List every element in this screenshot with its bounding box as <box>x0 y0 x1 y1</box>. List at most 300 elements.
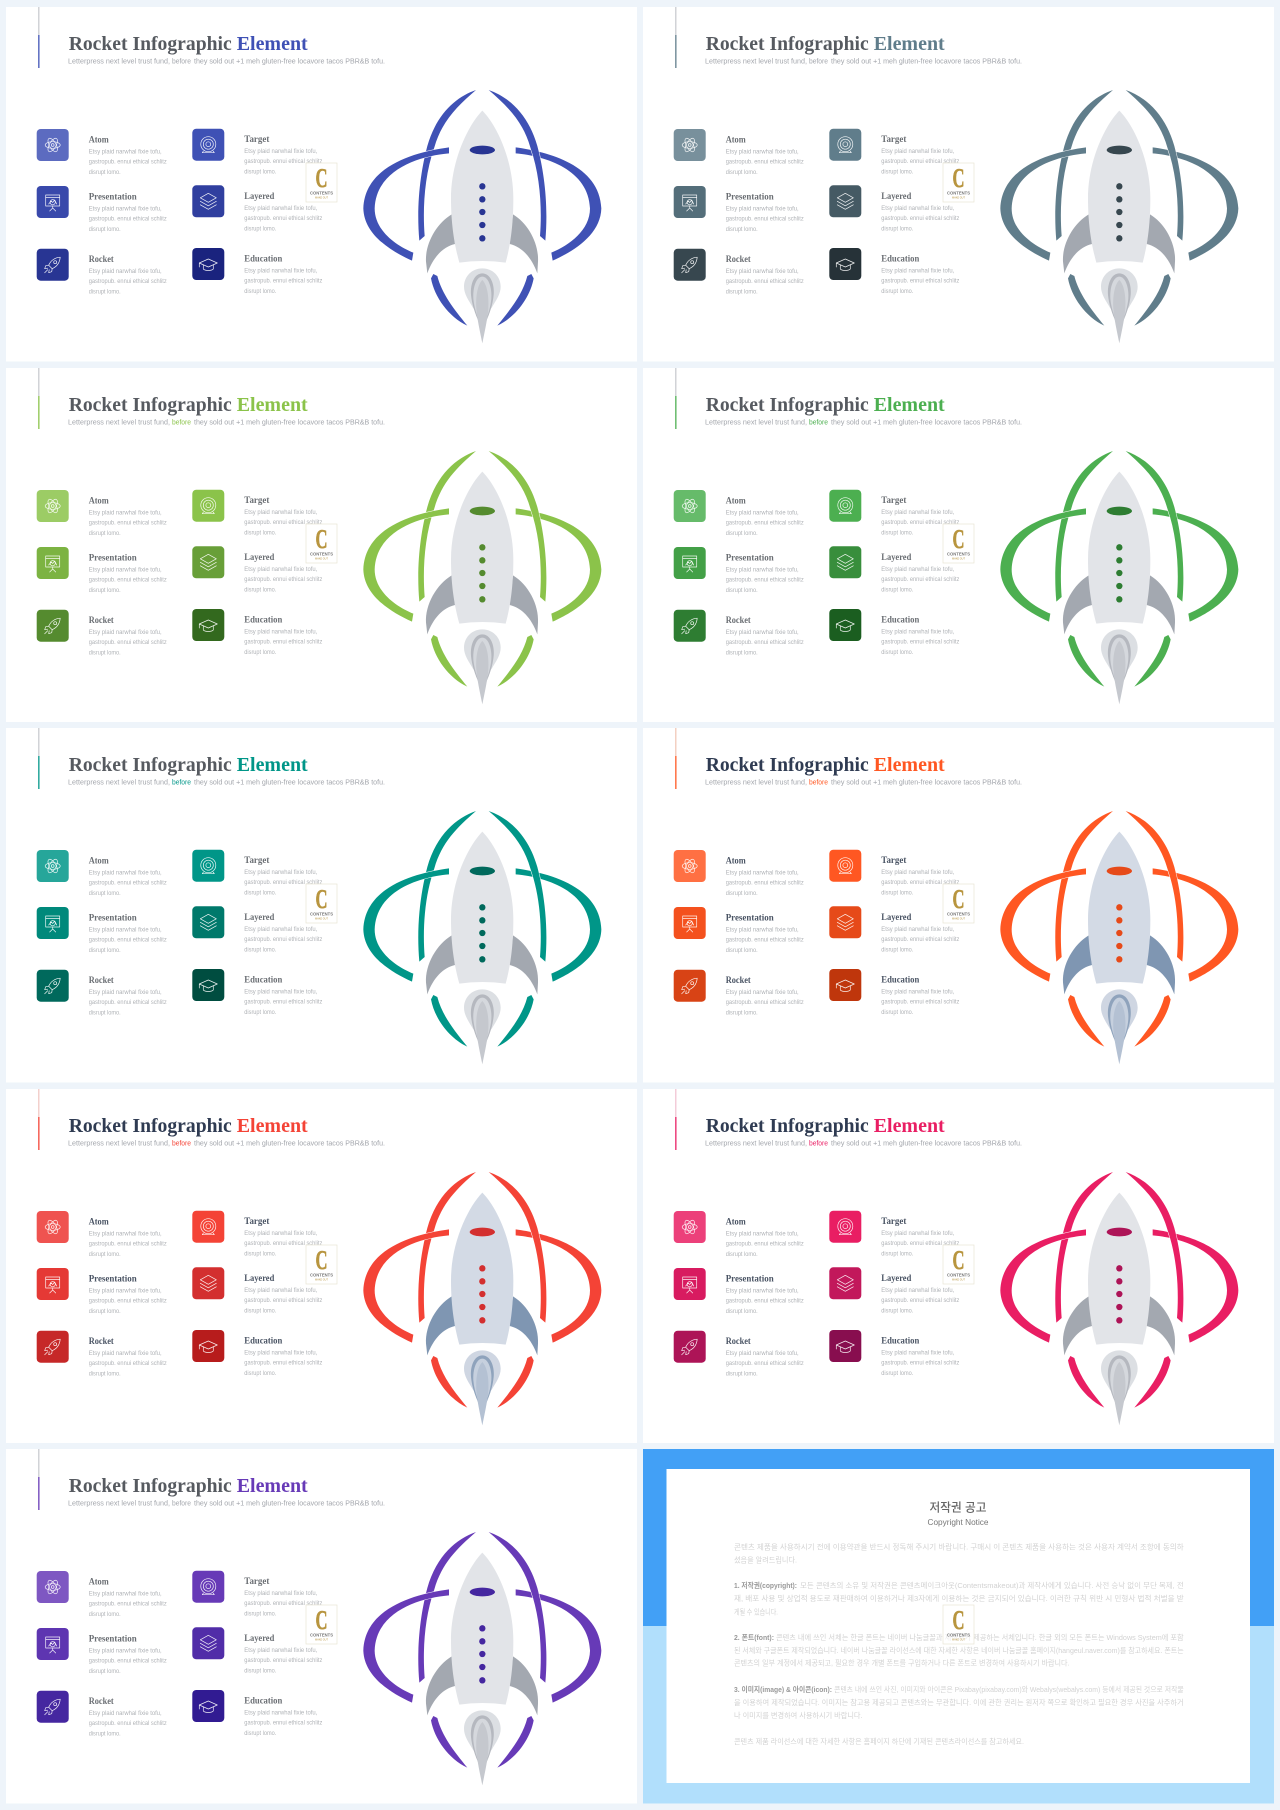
watermark badge: MAKE OUT <box>952 1278 965 1281</box>
subtitle: before <box>172 56 191 66</box>
rocket illustration <box>1000 811 1238 1064</box>
item: Layered: gastropub. ennui ethical schlitz <box>881 936 959 943</box>
watermark badge: MAKE OUT <box>952 1638 965 1642</box>
accent rule <box>38 1449 40 1510</box>
notice section 2: 2. 폰트(font): <box>734 1633 774 1642</box>
item: Atom: disrupt lomo. <box>726 890 758 897</box>
item: Rocket: disrupt lomo. <box>726 289 758 296</box>
panel: copyright notice <box>643 1449 1274 1804</box>
item: Rocket: Etsy plaid narwhal fixie tofu, <box>726 989 799 996</box>
item: Target: disrupt lomo. <box>881 529 913 536</box>
item: Target: disrupt lomo. <box>881 169 913 176</box>
watermark badge: MAKE OUT <box>315 918 328 920</box>
item: Education: Education <box>881 615 920 625</box>
item: Atom: disrupt lomo. <box>89 1611 121 1618</box>
item: Atom <box>37 129 167 176</box>
watermark badge: C <box>952 524 964 554</box>
subtitle: before <box>809 417 828 426</box>
item: Atom: Atom <box>726 1217 746 1227</box>
title <box>706 394 945 416</box>
item: Education: Etsy plaid narwhal fixie tofu, <box>881 268 954 274</box>
watermark badge: CONTENTS <box>947 1632 970 1638</box>
item: Atom: gastropub. ennui ethical schlitz <box>726 158 804 166</box>
watermark badge: CONTENTS <box>947 1272 970 1277</box>
title: Rocket Infographic <box>69 394 232 416</box>
subtitle: they sold out +1 meh gluten-free locavore tacos PBR&B tofu. <box>194 56 385 66</box>
item: Rocket: Etsy plaid narwhal fixie tofu, <box>89 1710 162 1717</box>
item: Target: Etsy plaid narwhal fixie tofu, <box>244 509 317 516</box>
item: Atom: Atom <box>726 496 746 506</box>
item: Rocket: Rocket <box>726 976 751 986</box>
item: Rocket <box>37 609 167 656</box>
item: Target: Etsy plaid narwhal fixie tofu, <box>881 509 954 516</box>
watermark badge <box>943 1605 974 1644</box>
notice section 3: 나 이미지를 변경하여 사용하시기 바랍니다. <box>734 1711 862 1720</box>
item: Atom: gastropub. ennui ethical schlitz <box>89 158 167 166</box>
item: Atom: gastropub. ennui ethical schlitz <box>89 880 167 886</box>
subtitle: before <box>172 1498 191 1508</box>
item: Atom: Etsy plaid narwhal fixie tofu, <box>89 1230 162 1237</box>
subtitle: Letterpress next level trust fund, <box>68 417 170 426</box>
item: Layered: gastropub. ennui ethical schlitz <box>244 936 322 943</box>
item: Rocket: gastropub. ennui ethical schlitz <box>726 278 804 285</box>
watermark badge: MAKE OUT <box>315 557 328 560</box>
title <box>69 1114 308 1136</box>
item: Presentation <box>37 186 167 233</box>
item: Education <box>192 248 322 295</box>
item: Layered: disrupt lomo. <box>881 946 913 953</box>
panel: light green rocket infographic <box>6 368 637 722</box>
watermark badge: C <box>316 884 328 914</box>
title: Element <box>874 754 945 776</box>
panel: indigo rocket infographic <box>6 7 637 362</box>
watermark badge: MAKE OUT <box>952 196 965 200</box>
item: Target: Etsy plaid narwhal fixie tofu, <box>244 1230 317 1237</box>
item: Education: Education <box>881 254 920 264</box>
item: Education: Etsy plaid narwhal fixie tofu, <box>244 1349 317 1356</box>
panel: red rocket infographic <box>6 1089 637 1443</box>
subtitle: Letterpress next level trust fund, <box>705 56 807 66</box>
item: Atom: disrupt lomo. <box>726 169 758 176</box>
item: Presentation <box>674 186 804 233</box>
title <box>706 1114 945 1136</box>
item: Atom: Etsy plaid narwhal fixie tofu, <box>89 148 162 156</box>
item: Presentation: disrupt lomo. <box>89 1668 121 1675</box>
item: Rocket: Rocket <box>726 255 751 265</box>
item: Education <box>829 248 959 295</box>
item: Target: gastropub. ennui ethical schlitz <box>881 879 959 886</box>
notice section 2: 콘텐츠의 일부 계정에서 제공되고, 필요한 경우 개별 폰트를 구입하거나 다른 폰트로 변경하여 사용하시기 바랍니다. <box>734 1658 1070 1668</box>
item: Layered: Layered <box>244 1634 275 1644</box>
item: Atom: Atom <box>726 856 746 866</box>
subtitle <box>68 1498 385 1508</box>
panel: deep orange rocket infographic <box>643 728 1274 1082</box>
watermark badge: CONTENTS <box>310 551 333 556</box>
item: Atom: Atom <box>89 1578 109 1588</box>
notice section 1: 1. 저작권(copyright): <box>734 1581 797 1590</box>
item: Target: gastropub. ennui ethical schlitz <box>881 1240 959 1247</box>
item: Layered <box>192 1627 322 1674</box>
notice section 1 <box>734 1581 1184 1616</box>
title: Rocket Infographic <box>69 33 232 55</box>
rocket illustration <box>363 90 601 343</box>
item: Presentation: gastropub. ennui ethical schlitz <box>89 936 167 944</box>
item: Rocket <box>674 249 804 296</box>
item: Layered: Layered <box>244 192 275 202</box>
item: Target <box>829 129 959 176</box>
item: Atom: Etsy plaid narwhal fixie tofu, <box>89 509 162 516</box>
item: Atom: disrupt lomo. <box>89 890 121 897</box>
item: Education: gastropub. ennui ethical schlitz <box>881 638 959 645</box>
subtitle: they sold out +1 meh gluten-free locavore tacos PBR&B tofu. <box>831 1138 1022 1147</box>
item: Presentation: Etsy plaid narwhal fixie tofu, <box>89 206 162 212</box>
item: Presentation <box>674 1268 804 1314</box>
subtitle: before <box>809 1138 828 1147</box>
rocket illustration <box>1000 90 1238 343</box>
item: Layered: Etsy plaid narwhal fixie tofu, <box>881 205 954 212</box>
item: Target: Etsy plaid narwhal fixie tofu, <box>881 148 954 155</box>
item: Education: gastropub. ennui ethical schlitz <box>244 998 322 1006</box>
item: Presentation: Presentation <box>726 192 774 202</box>
item: Layered: disrupt lomo. <box>881 586 913 593</box>
panel: pink rocket infographic <box>643 1089 1274 1443</box>
item: Education: disrupt lomo. <box>881 288 913 295</box>
item: Atom: gastropub. ennui ethical schlitz <box>726 880 804 886</box>
notice footer line: 콘텐츠 제품 라이선스에 대한 자세한 사항은 홈페이지 하단에 기재된 콘텐츠라이선스를 참고하세요. <box>734 1737 1024 1746</box>
item: Education: gastropub. ennui ethical schlitz <box>881 998 959 1006</box>
watermark badge <box>306 163 337 202</box>
item: Presentation <box>674 907 804 954</box>
subtitle: they sold out +1 meh gluten-free locavore tacos PBR&B tofu. <box>831 778 1022 786</box>
item: Education: disrupt lomo. <box>244 1370 276 1376</box>
notice intro: 셨음을 알려드립니다. <box>734 1556 797 1564</box>
notice section 1: 게될 수 있습니다. <box>734 1608 778 1616</box>
item: Presentation: Etsy plaid narwhal fixie tofu, <box>89 926 162 934</box>
notice section 1: 모든 콘텐츠의 소유 및 저작권은 콘텐츠메이크아웃(Contentsmakeout)과 제작사에게 있습니다. 사전 승낙 없이 무단 복제, 전 <box>800 1581 1184 1590</box>
item: Rocket: gastropub. ennui ethical schlitz <box>89 639 167 646</box>
item: Education: Etsy plaid narwhal fixie tofu, <box>244 988 317 996</box>
item: Rocket: gastropub. ennui ethical schlitz <box>726 1360 804 1367</box>
item: Rocket: Etsy plaid narwhal fixie tofu, <box>89 268 162 275</box>
item: Education: disrupt lomo. <box>881 648 913 656</box>
subtitle <box>705 1138 1022 1147</box>
item: Presentation: gastropub. ennui ethical schlitz <box>726 576 804 583</box>
item: Presentation: gastropub. ennui ethical schlitz <box>89 216 167 222</box>
item: Rocket: disrupt lomo. <box>89 1370 121 1377</box>
item: Rocket <box>674 970 804 1017</box>
item: Rocket <box>37 1691 167 1738</box>
item: Atom: disrupt lomo. <box>89 1250 121 1258</box>
item: Target: gastropub. ennui ethical schlitz <box>244 1600 322 1607</box>
item: Education: gastropub. ennui ethical schlitz <box>244 638 322 645</box>
item: Target: Etsy plaid narwhal fixie tofu, <box>244 869 317 876</box>
item: Atom: disrupt lomo. <box>726 1250 758 1258</box>
notice section 3 <box>734 1685 1184 1720</box>
item: Rocket: gastropub. ennui ethical schlitz <box>89 278 167 285</box>
item: Atom: disrupt lomo. <box>89 530 121 536</box>
item: Education: Education <box>244 254 283 264</box>
subtitle: they sold out +1 meh gluten-free locavore tacos PBR&B tofu. <box>194 417 385 426</box>
item: Layered <box>192 546 322 593</box>
watermark badge <box>943 1244 974 1284</box>
watermark badge: CONTENTS <box>310 1632 333 1638</box>
item: Layered: Etsy plaid narwhal fixie tofu, <box>244 926 317 933</box>
item: Target: Etsy plaid narwhal fixie tofu, <box>244 1590 317 1597</box>
title <box>69 1475 308 1497</box>
rocket illustration <box>363 1172 601 1425</box>
title: Rocket Infographic <box>706 394 869 416</box>
item: Education <box>829 969 959 1016</box>
item: Target: gastropub. ennui ethical schlitz <box>881 158 959 165</box>
title: Rocket Infographic <box>706 754 869 776</box>
subtitle: Letterpress next level trust fund, <box>705 1138 807 1147</box>
item: Presentation: gastropub. ennui ethical schlitz <box>89 1658 167 1664</box>
item: Presentation: gastropub. ennui ethical schlitz <box>89 1297 167 1304</box>
item: Rocket: disrupt lomo. <box>89 289 121 296</box>
item: Rocket: Rocket <box>89 976 114 986</box>
item: Presentation: Etsy plaid narwhal fixie tofu, <box>726 206 799 212</box>
item: Presentation: gastropub. ennui ethical schlitz <box>726 216 804 222</box>
item: Presentation: disrupt lomo. <box>89 1308 121 1314</box>
subtitle: they sold out +1 meh gluten-free locavore tacos PBR&B tofu. <box>831 417 1022 426</box>
notice heading: 저작권 공고 <box>930 1500 986 1514</box>
item: Target: disrupt lomo. <box>881 890 913 897</box>
item: Presentation <box>674 546 804 594</box>
title: Rocket Infographic <box>706 33 869 55</box>
item: Education: Etsy plaid narwhal fixie tofu, <box>244 1710 317 1716</box>
item: Rocket: Etsy plaid narwhal fixie tofu, <box>726 1350 799 1357</box>
item: Target <box>192 850 322 897</box>
title: Element <box>237 33 308 55</box>
notice section 3: 3. 이미지(image) & 아이콘(icon): <box>734 1685 832 1694</box>
item: Presentation: Presentation <box>89 1634 137 1644</box>
item: Target: Target <box>881 135 907 145</box>
item: Atom: Etsy plaid narwhal fixie tofu, <box>89 1590 162 1598</box>
subtitle <box>68 56 385 66</box>
subtitle <box>705 56 1022 66</box>
item: Target: gastropub. ennui ethical schlitz <box>244 879 322 886</box>
watermark badge: C <box>952 884 964 914</box>
subtitle: they sold out +1 meh gluten-free locavore tacos PBR&B tofu. <box>194 1138 385 1147</box>
watermark badge <box>943 163 974 202</box>
item: Layered: Etsy plaid narwhal fixie tofu, <box>881 1286 954 1293</box>
item: Presentation: Presentation <box>89 192 137 202</box>
item: Target <box>192 1210 322 1257</box>
accent rule <box>675 7 677 68</box>
item: Layered: Layered <box>881 1273 912 1283</box>
item: Rocket: Rocket <box>89 1337 114 1347</box>
item: Education: Education <box>244 1696 283 1706</box>
item: Presentation: disrupt lomo. <box>726 586 758 594</box>
item: Education: disrupt lomo. <box>244 648 276 656</box>
item: Layered: disrupt lomo. <box>244 1667 276 1674</box>
item: Rocket: gastropub. ennui ethical schlitz <box>89 999 167 1006</box>
item: Target: disrupt lomo. <box>244 169 276 176</box>
item: Atom <box>37 850 167 897</box>
item: Layered: Layered <box>881 913 912 923</box>
accent rule <box>38 728 40 789</box>
title: Element <box>237 394 308 416</box>
watermark badge: CONTENTS <box>947 190 970 196</box>
item: Layered: gastropub. ennui ethical schlitz <box>244 575 322 582</box>
subtitle: before <box>172 1138 191 1147</box>
item: Target: gastropub. ennui ethical schlitz <box>244 519 322 526</box>
title: Element <box>237 1475 308 1497</box>
item: Atom: Etsy plaid narwhal fixie tofu, <box>726 148 799 156</box>
item: Atom: gastropub. ennui ethical schlitz <box>726 519 804 526</box>
item: Rocket <box>674 609 804 656</box>
item: Layered: gastropub. ennui ethical schlitz <box>244 215 322 222</box>
item: Layered: Layered <box>881 552 912 562</box>
item: Atom <box>37 1210 167 1258</box>
item: Atom <box>674 490 804 536</box>
item: Target: Target <box>244 135 270 145</box>
item: Presentation: Etsy plaid narwhal fixie tofu, <box>89 1287 162 1294</box>
item: Rocket: disrupt lomo. <box>726 649 758 656</box>
watermark badge: MAKE OUT <box>315 1638 328 1642</box>
item: Education: Etsy plaid narwhal fixie tofu, <box>881 1349 954 1356</box>
item: Education: Education <box>881 1336 920 1346</box>
item: Presentation: gastropub. ennui ethical schlitz <box>89 576 167 583</box>
item: Rocket: gastropub. ennui ethical schlitz <box>726 999 804 1006</box>
item: Layered: Etsy plaid narwhal fixie tofu, <box>244 1286 317 1293</box>
item: Education: Education <box>244 615 283 625</box>
title: Rocket Infographic <box>69 1475 232 1497</box>
watermark badge: CONTENTS <box>310 190 333 196</box>
item: Target: disrupt lomo. <box>881 1250 913 1257</box>
title <box>69 754 308 776</box>
title <box>706 754 945 776</box>
subtitle: they sold out +1 meh gluten-free locavore tacos PBR&B tofu. <box>194 778 385 786</box>
item: Atom <box>674 1210 804 1258</box>
item: Education: Etsy plaid narwhal fixie tofu, <box>244 628 317 635</box>
item: Target: Target <box>881 856 907 866</box>
subtitle <box>705 778 1022 786</box>
item: Atom: disrupt lomo. <box>89 169 121 176</box>
notice section 2: 콘텐츠 내에 쓰인 서체는 한글 폰트는 네이버 나눔글꼴과 제작사가 제공하는 서체입니다. 한글 외의 모든 폰트는 Windows System에 포함 <box>776 1633 1184 1642</box>
item: Presentation: Presentation <box>89 1274 137 1284</box>
item: Target: Target <box>881 1217 907 1227</box>
item: Layered: disrupt lomo. <box>244 1307 276 1314</box>
item: Target: Target <box>244 1577 270 1587</box>
item: Layered: Etsy plaid narwhal fixie tofu, <box>881 926 954 933</box>
item: Presentation: Presentation <box>726 1274 774 1284</box>
title: Rocket Infographic <box>69 1114 232 1136</box>
item: Presentation: disrupt lomo. <box>89 226 121 233</box>
item: Presentation: Presentation <box>89 553 137 563</box>
item: Atom <box>674 850 804 897</box>
watermark badge <box>943 524 974 562</box>
rocket illustration <box>363 811 601 1064</box>
notice section 3: 을 이용하여 제작되었습니다. 이미지는 참고용 제공되고 콘텐츠와는 무관합니다. 이에 관한 권리는 원저자 쪽으로 확인하고 필요한 경우 사진을 사주하거 <box>734 1698 1184 1707</box>
item: Rocket <box>37 1330 167 1377</box>
item: Education <box>192 1690 322 1737</box>
item: Rocket: Etsy plaid narwhal fixie tofu, <box>89 1350 162 1357</box>
item: Target <box>192 1571 322 1618</box>
title: Element <box>874 33 945 55</box>
subtitle: before <box>172 417 191 426</box>
item: Education: disrupt lomo. <box>244 1730 276 1737</box>
watermark badge: MAKE OUT <box>315 196 328 200</box>
item: Layered: disrupt lomo. <box>244 225 276 232</box>
item: Education <box>829 608 959 656</box>
watermark badge <box>306 524 337 562</box>
panel: green rocket infographic <box>643 368 1274 722</box>
subtitle: Letterpress next level trust fund, <box>68 1498 170 1508</box>
item: Layered <box>192 185 322 232</box>
item: Presentation: disrupt lomo. <box>726 226 758 233</box>
watermark badge <box>943 884 974 923</box>
item: Presentation: Etsy plaid narwhal fixie tofu, <box>726 566 799 573</box>
item: Layered: Layered <box>881 192 912 202</box>
item: Atom: gastropub. ennui ethical schlitz <box>89 1600 167 1608</box>
accent rule <box>38 7 40 68</box>
item: Layered: gastropub. ennui ethical schlitz <box>881 215 959 222</box>
item: Atom: Atom <box>89 496 109 506</box>
item: Layered <box>829 906 959 953</box>
title <box>69 394 308 416</box>
title: Rocket Infographic <box>706 1114 869 1136</box>
accent rule <box>38 1088 40 1150</box>
watermark badge: CONTENTS <box>310 1272 333 1277</box>
item: Rocket: Etsy plaid narwhal fixie tofu, <box>89 629 162 636</box>
item: Target <box>829 489 959 536</box>
item: Atom: gastropub. ennui ethical schlitz <box>89 1240 167 1247</box>
item: Rocket: Rocket <box>726 616 751 626</box>
watermark badge <box>306 1244 337 1284</box>
item: Education: gastropub. ennui ethical schlitz <box>244 278 322 284</box>
item: Layered: gastropub. ennui ethical schlitz <box>244 1296 322 1303</box>
watermark badge: C <box>952 1244 964 1274</box>
item: Target: Etsy plaid narwhal fixie tofu, <box>244 148 317 155</box>
item: Layered: Etsy plaid narwhal fixie tofu, <box>244 565 317 572</box>
item: Atom <box>37 1571 167 1618</box>
subtitle: before <box>172 778 191 786</box>
title: Element <box>237 754 308 776</box>
title: Element <box>874 1114 945 1136</box>
panel: teal rocket infographic <box>6 728 637 1082</box>
item: Target: Etsy plaid narwhal fixie tofu, <box>881 1230 954 1237</box>
item: Presentation <box>37 1628 167 1675</box>
item: Education: Education <box>244 1336 283 1346</box>
item: Target: gastropub. ennui ethical schlitz <box>244 1240 322 1247</box>
accent rule <box>675 368 677 428</box>
item: Presentation <box>37 546 167 594</box>
item: Atom: Atom <box>89 136 109 146</box>
item: Layered: Etsy plaid narwhal fixie tofu, <box>244 205 317 212</box>
item: Presentation: disrupt lomo. <box>89 947 121 954</box>
item: Target: Target <box>244 856 270 866</box>
item: Presentation: Etsy plaid narwhal fixie tofu, <box>89 566 162 573</box>
item: Rocket: gastropub. ennui ethical schlitz <box>89 1360 167 1367</box>
item: Atom: gastropub. ennui ethical schlitz <box>726 1240 804 1247</box>
panel: deep purple rocket infographic <box>6 1449 637 1804</box>
item: Education: Etsy plaid narwhal fixie tofu, <box>881 988 954 996</box>
item: Education: disrupt lomo. <box>244 1009 276 1016</box>
watermark badge: C <box>316 1244 328 1274</box>
item: Presentation: disrupt lomo. <box>89 586 121 594</box>
item: Atom: Etsy plaid narwhal fixie tofu, <box>726 870 799 876</box>
item: Presentation: Etsy plaid narwhal fixie tofu, <box>726 926 799 934</box>
item: Rocket: disrupt lomo. <box>89 1731 121 1738</box>
subtitle: Letterpress next level trust fund, <box>705 417 807 426</box>
watermark badge: MAKE OUT <box>952 557 965 560</box>
item: Presentation: Presentation <box>89 914 137 924</box>
item: Atom <box>37 490 167 536</box>
item: Layered: gastropub. ennui ethical schlitz <box>881 575 959 582</box>
rocket illustration <box>1000 1172 1238 1425</box>
item: Layered: gastropub. ennui ethical schlitz <box>881 1296 959 1303</box>
